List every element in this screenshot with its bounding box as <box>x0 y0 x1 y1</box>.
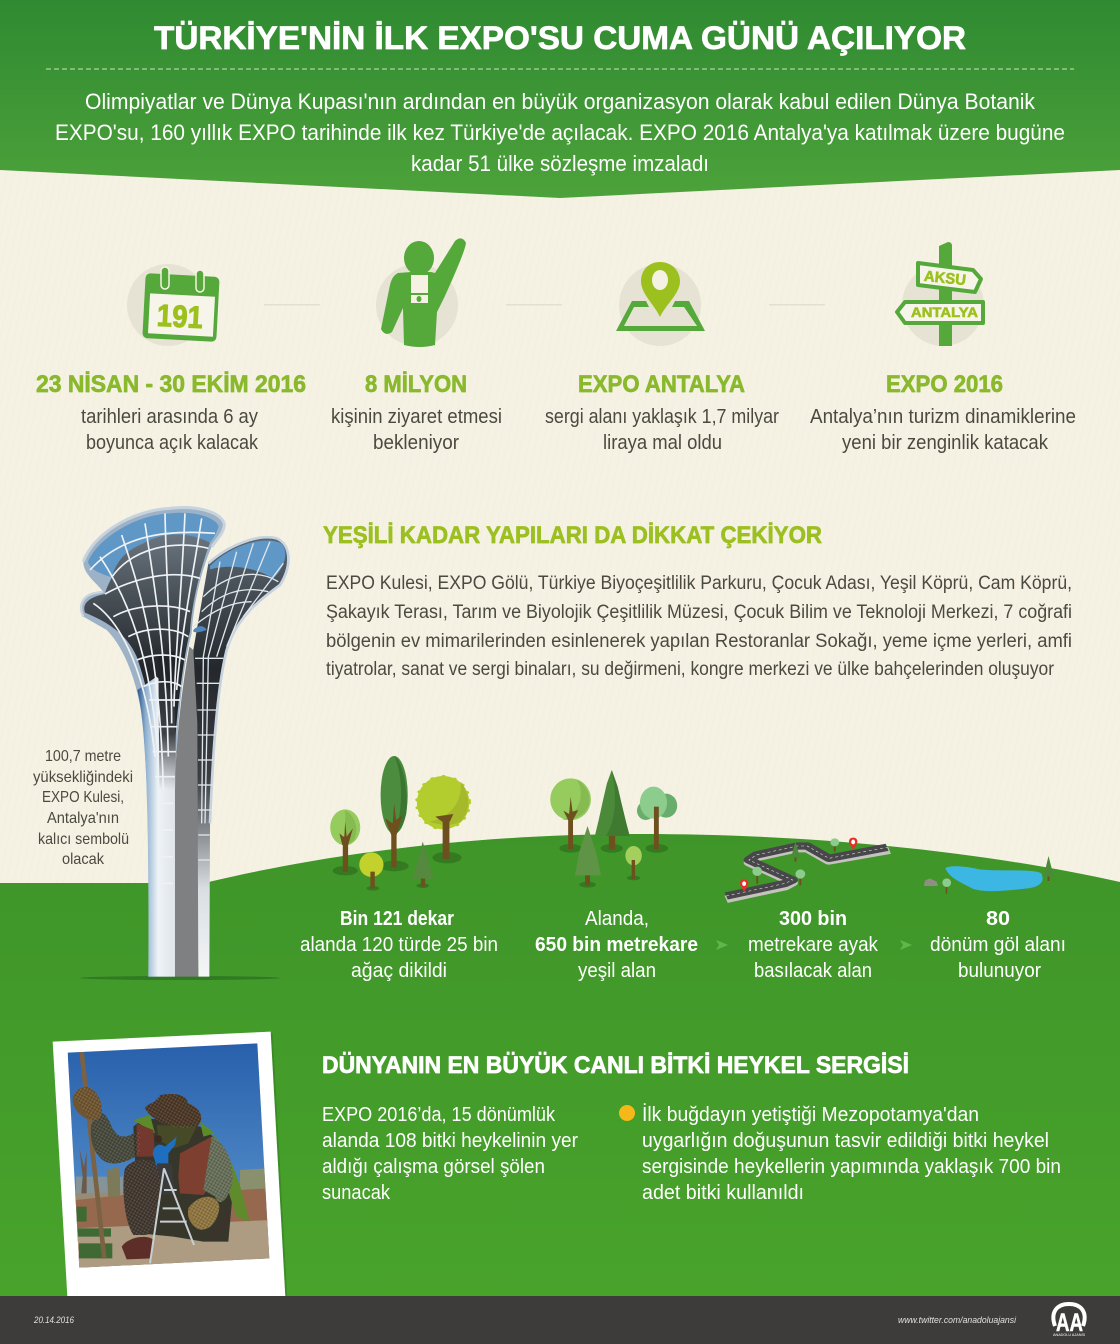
intro text: Olimpiyatlar ve Dünya Kupası'nın ardından en büyük organizasyon olarak kabul edilen Dünya Botanik <box>85 89 1036 114</box>
tower caption: yüksekliğindeki <box>33 769 133 786</box>
fact: visitors <box>331 371 502 454</box>
tree <box>413 842 433 887</box>
arrow <box>900 940 912 950</box>
text: structures list: tiyatrolar, sanat ve sergi binaları, su değirmeni, kongre merkezi ve ülke bahçelerinden oluşuyor <box>326 659 1055 680</box>
stat: green area: Alanda, <box>585 908 649 930</box>
fact: dates <box>36 371 306 454</box>
logo: Anadolu Ajansi <box>1053 1304 1085 1337</box>
tree <box>550 778 591 849</box>
text: sculptures left: EXPO 2016’da, 15 dönümlük <box>322 1104 556 1126</box>
text: structures list <box>326 573 1072 680</box>
fact: visitors: bekleniyor <box>373 432 459 454</box>
icon: calendar: 191 <box>156 298 204 335</box>
fact: dates: boyunca açık kalacak <box>86 432 259 454</box>
fact: tourism <box>810 371 1076 454</box>
stat: walking area: metrekare ayak <box>748 934 879 956</box>
tree <box>637 787 677 849</box>
icon: visitor <box>376 238 466 347</box>
fact: tourism: Antalya’nın turizm dinamiklerine <box>810 406 1076 428</box>
tower shadow <box>80 976 280 980</box>
tower caption <box>33 748 133 868</box>
tree <box>381 756 408 867</box>
text: sculptures right <box>642 1103 1061 1204</box>
stat: lake: dönüm göl alanı <box>930 934 1066 956</box>
illustration: EXPO tower <box>81 508 288 977</box>
text: structures list: EXPO Kulesi, EXPO Gölü, Türkiye Biyoçeşitlilik Parkuru, Çocuk Adası, Yeşil Köprü, Cam Köprü, <box>326 573 1072 594</box>
tree <box>595 770 630 849</box>
text: sculptures left: alanda 108 bitki heykelinin yer <box>322 1130 578 1152</box>
heading: structures: YEŞİLİ KADAR YAPILARI DA DİKKAT ÇEKİYOR <box>323 522 822 549</box>
fact: cost: sergi alanı yaklaşık 1,7 milyar <box>545 406 779 428</box>
tower caption: EXPO Kulesi, <box>42 789 124 806</box>
tower caption: 100,7 metre <box>45 748 121 765</box>
panel: header <box>0 0 1120 198</box>
stat: trees <box>300 908 498 982</box>
tree <box>417 776 469 859</box>
source url: www.twitter.com/anadoluajansi <box>898 1315 1017 1325</box>
fact: tourism: yeni bir zenginlik katacak <box>842 432 1049 454</box>
ground hill <box>0 834 1120 1300</box>
stat: lake: 80 <box>986 908 1010 930</box>
fact: tourism: EXPO 2016 <box>886 371 1003 398</box>
tree <box>575 826 601 885</box>
stat: trees: Bin 121 dekar <box>340 908 454 930</box>
tower caption: Antalya'nın <box>47 810 119 827</box>
road <box>726 846 890 899</box>
text: sculptures left: aldığı çalışma görsel şölen <box>322 1156 545 1178</box>
footer <box>0 1296 1120 1344</box>
stat: green area <box>535 908 698 982</box>
icon: calendar <box>127 264 220 346</box>
fact: dates: 23 NİSAN - 30 EKİM 2016 <box>36 371 306 398</box>
text: sculptures right: uygarlığın doğuşunun tasvir edildiği bitki heykel <box>642 1130 1049 1152</box>
icon: signpost <box>897 242 984 346</box>
tree <box>359 852 383 888</box>
fact: dates: tarihleri arasında 6 ay <box>81 406 258 428</box>
title: TÜRKİYE'NİN İLK EXPO'SU CUMA GÜNÜ AÇILIYOR <box>154 20 966 56</box>
text: structures list: Şakayık Terası, Tarım ve Biyolojik Çeşitlilik Müzesi, Çocuk Bilim ve Teknoloji Merkezi, 7 coğrafi <box>326 602 1072 623</box>
fact: visitors: kişinin ziyaret etmesi <box>331 406 502 428</box>
stat: trees: alanda 120 türde 25 bin <box>300 934 498 956</box>
tower caption: olacak <box>62 851 105 868</box>
date: 20.14.2016 <box>33 1315 74 1325</box>
text: sculptures right: İlk buğdayın yetiştiği Mezopotamya'dan <box>642 1103 979 1126</box>
text: sculptures right: adet bitki kullanıldı <box>642 1182 804 1204</box>
panel: sculpture exhibition <box>322 1052 1061 1204</box>
panel: green area stats <box>300 908 1066 982</box>
logo: Anadolu Ajansi: ANADOLU AJANSI <box>1053 1333 1085 1337</box>
road markers <box>740 838 857 892</box>
tower caption: kalıcı sembolü <box>38 831 129 848</box>
icon: map pin <box>616 262 705 346</box>
text: sculptures right: sergisinde heykellerin yapımında yaklaşık 700 bin <box>642 1156 1061 1178</box>
stat: walking area: basılacak alan <box>754 960 872 982</box>
fact: visitors: 8 MİLYON <box>365 371 467 398</box>
photo: plant sculpture <box>53 1032 287 1297</box>
text: structures list: bölgenin ev mimarilerinden esinlenerek yapılan Restoranlar Sokağı, yeme içme yerleri, amfi <box>326 631 1072 652</box>
heading: sculptures: DÜNYANIN EN BÜYÜK CANLI BİTKİ HEYKEL SERGİSİ <box>322 1052 909 1079</box>
stat: lake: bulunuyor <box>958 960 1041 982</box>
stat: walking area: 300 bin <box>779 908 847 930</box>
panel: key facts <box>36 238 1076 454</box>
icon: signpost: AKSU <box>923 268 967 289</box>
stat: green area: yeşil alan <box>578 960 656 982</box>
small trees and rock <box>752 838 1054 894</box>
logo: Anadolu Ajansi: AA <box>1056 1309 1083 1337</box>
fact: cost <box>545 371 779 454</box>
text: sculptures left <box>322 1104 578 1204</box>
intro text <box>55 89 1065 176</box>
text: sculptures left: sunacak <box>322 1182 391 1204</box>
stat: trees: ağaç dikildi <box>351 960 447 982</box>
lake <box>945 866 1043 891</box>
intro text: EXPO'su, 160 yıllık EXPO tarihinde ilk kez Türkiye'de açılacak. EXPO 2016 Antalya'ya katılmak üzere bugüne <box>55 120 1065 145</box>
stat: walking area <box>748 908 879 982</box>
tree <box>625 846 642 879</box>
icon: signpost: ANTALYA <box>911 304 978 320</box>
illustration: trees, road and lake <box>330 756 1054 899</box>
intro text: kadar 51 ülke sözleşme imzaladı <box>411 151 709 176</box>
arrow <box>716 940 728 950</box>
stat: green area: 650 bin metrekare <box>535 934 698 956</box>
panel: structures <box>323 522 1072 680</box>
stat: lake <box>930 908 1066 982</box>
tree <box>330 809 360 872</box>
bullet <box>619 1105 635 1121</box>
fact: cost: liraya mal oldu <box>603 432 722 454</box>
fact: cost: EXPO ANTALYA <box>578 371 745 398</box>
